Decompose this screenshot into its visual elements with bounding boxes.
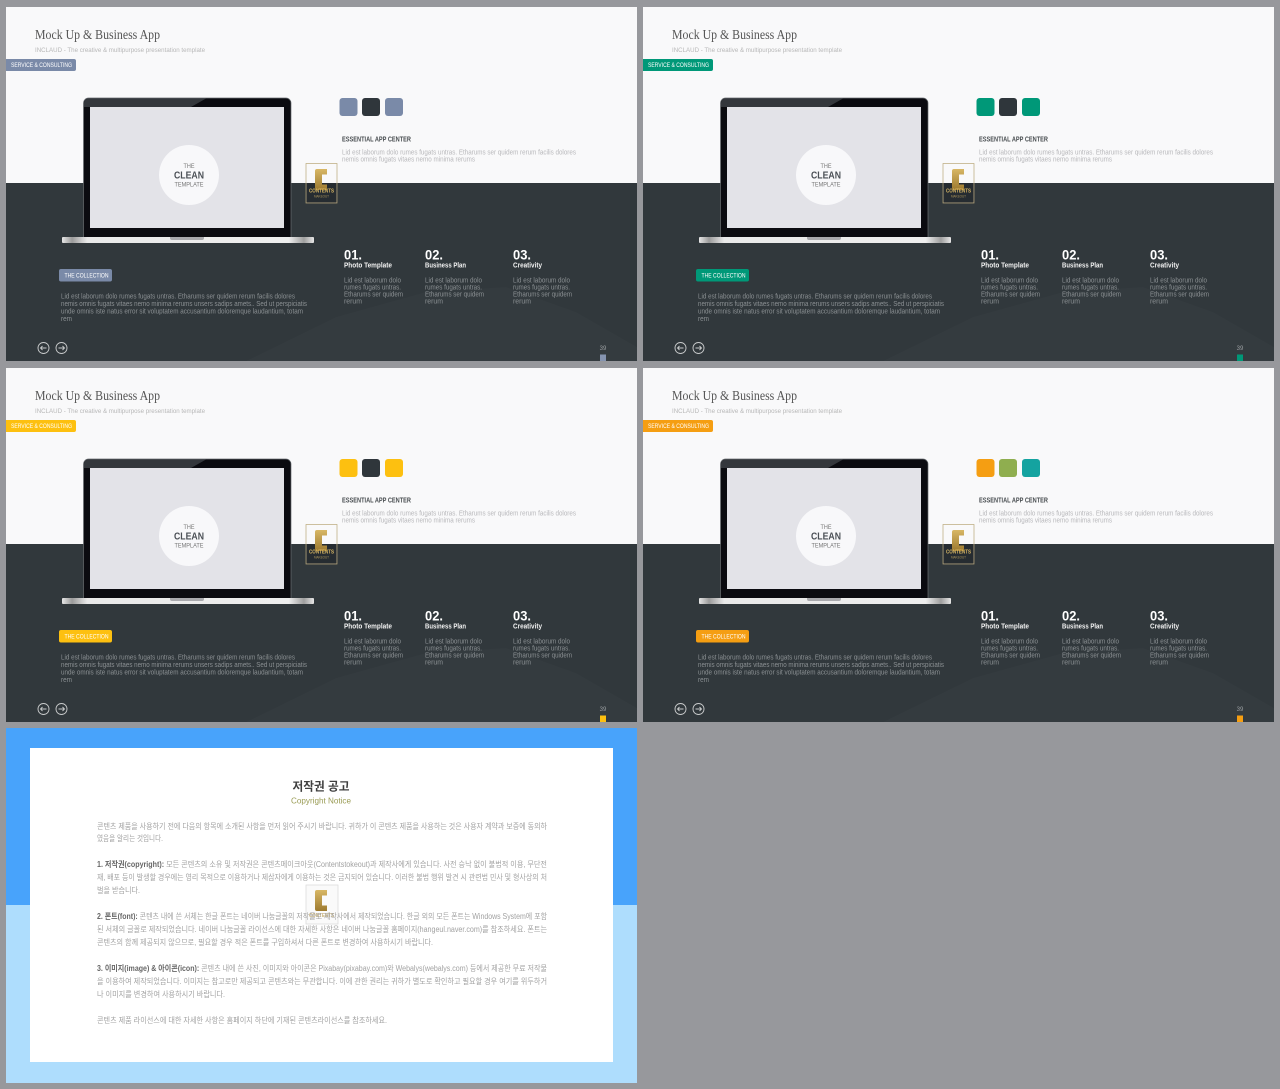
column 01 — [981, 608, 1040, 666]
column 01: rerum — [344, 660, 362, 666]
column 02: rerum — [425, 298, 443, 306]
dark lower panel — [643, 544, 1274, 722]
collection paragraph: Lid est laborum dolo rumes fugats untras. Etharums ser quidem rerum facilis dolores — [61, 294, 295, 300]
collection paragraph: rem — [61, 316, 72, 323]
screen badge: the clean template: TEMPLATE — [812, 542, 841, 550]
screen badge: the clean template — [159, 145, 219, 205]
collection paragraph: nemis omnis fugats vitaes nemo minima rerums unsers sadips amets.. Sed ut perspiciatis — [61, 662, 307, 669]
collection paragraph — [698, 654, 944, 684]
colour swatches — [340, 459, 403, 477]
collection paragraph — [61, 294, 307, 323]
section 3: image and icon: 나 이미지를 변경하여 사용하시기 바랍니다. — [97, 989, 225, 999]
service badge: SERVICE & CONSULTING — [648, 423, 709, 430]
background polygons — [246, 287, 637, 361]
screen badge: the clean template: THE — [820, 524, 832, 531]
page number: 39 — [1237, 346, 1244, 352]
collection paragraph: Lid est laborum dolo rumes fugats untras. Etharums ser quidem rerum facilis dolores — [698, 294, 932, 300]
column 01: 01. — [344, 608, 362, 624]
slide background — [643, 368, 1274, 722]
column 03: 03. — [513, 248, 531, 262]
column 02: 02. — [1062, 608, 1080, 624]
column 02 — [1062, 608, 1121, 666]
essential app center text: nemis omnis fugats vitaes nemo minima rerums — [979, 156, 1112, 164]
light blue lower background — [6, 905, 637, 1083]
closing line: 콘텐츠 제품 라이선스에 대한 자세한 사항은 홈페이지 하단에 기재된 콘텐츠라이선스를 참조하세요. — [97, 1015, 387, 1025]
collection paragraph: rem — [698, 677, 709, 684]
watermark logo: CONTENTS — [309, 188, 335, 194]
white notice panel — [30, 748, 613, 1062]
intro paragraph: 였음을 알리는 것입니다. — [97, 833, 163, 843]
collection paragraph: unde omnis iste natus error sit voluptatem accusantium doloremque laudantium, totam — [61, 308, 303, 316]
screen badge: the clean template: CLEAN — [811, 170, 841, 182]
column 03: rerum — [1150, 660, 1168, 666]
column 03: Etharums ser quidem — [1150, 292, 1209, 298]
column 02: rumes fugats untras. — [1062, 646, 1119, 652]
background polygons — [246, 648, 637, 722]
service badge — [643, 59, 713, 71]
column 01: Etharums ser quidem — [344, 292, 403, 298]
section 1: copyright: 재, 배포 등이 발생할 경우에는 영리 목적으로 이용하거나 제삼자에게 이용하는 것은 금지되어 있습니다. 이러한 불법 행위 발견 시 관련법 민사 및 형사상의 처 — [97, 872, 547, 882]
essential app center text: nemis omnis fugats vitaes nemo minima rerums — [342, 156, 475, 164]
colour swatches — [340, 98, 403, 116]
screen badge: the clean template: TEMPLATE — [174, 182, 204, 188]
screen badge: the clean template — [796, 145, 856, 205]
column 02: Etharums ser quidem — [425, 292, 484, 298]
laptop mockup — [699, 98, 951, 243]
arrow: previous — [675, 342, 686, 354]
blue upper background — [6, 728, 637, 905]
column 02: Business Plan — [425, 624, 466, 630]
title: Mock Up & Business App — [672, 27, 797, 42]
essential app center text — [979, 136, 1213, 164]
column 03: rumes fugats untras. — [1150, 646, 1207, 652]
arrow: next — [56, 704, 67, 714]
collection badge — [696, 269, 749, 282]
column 01: Photo Template — [981, 262, 1029, 270]
column 01: rerum — [981, 298, 999, 306]
column 02: Business Plan — [1062, 262, 1103, 270]
column 01: rerum — [981, 660, 999, 666]
column 02: 02. — [425, 248, 443, 262]
column 01: Etharums ser quidem — [981, 652, 1040, 660]
column 03: Lid est laborum dolo — [513, 638, 570, 646]
slide 2: green — [643, 7, 1274, 361]
service badge — [643, 420, 713, 432]
watermark logo: MAKEOUT — [314, 194, 330, 198]
essential app center text: Lid est laborum dolo rumes fugats untras. Etharums ser quidem rerum facilis dolores — [342, 150, 576, 156]
column 03: Etharums ser quidem — [1150, 652, 1209, 660]
section 2: font: 콘텐츠의 함께 제공되지 않으므로, 필요할 경우 적은 폰트를 구입하셔서 다른 폰트로 변경하여 사용하시기 바랍니다. — [97, 937, 433, 947]
watermark logo: CONTENTS — [946, 188, 972, 194]
screen badge: the clean template: TEMPLATE — [174, 542, 204, 550]
collection paragraph: unde omnis iste natus error sit voluptatem accusantium doloremque laudantium, totam — [61, 670, 303, 676]
section 2: font — [97, 911, 548, 947]
essential app center text: Lid est laborum dolo rumes fugats untras. Etharums ser quidem rerum facilis dolores — [979, 510, 1213, 518]
watermark logo: CONTENTS — [946, 550, 972, 556]
screen badge: the clean template: CLEAN — [174, 530, 204, 542]
slide background — [643, 7, 1274, 361]
watermark logo: CONTENTS — [309, 550, 335, 556]
laptop mockup — [699, 459, 951, 604]
slide 1: slate blue — [6, 7, 637, 361]
subtitle: INCLAUD - The creative & multipurpose presentation template — [35, 47, 205, 54]
column 01: Photo Template — [981, 624, 1029, 630]
column 02: rumes fugats untras. — [1062, 284, 1119, 292]
column 03: rerum — [1150, 298, 1168, 306]
section 2: font: 2. 폰트(font): 콘텐츠 내에 쓴 서체는 한글 폰트는 네이버 나눔글꼴의 저작물로 제작사에서 제작되었습니다. 한글 외의 모든 폰트는 Windows System에 포함 — [97, 911, 548, 921]
title: Mock Up & Business App — [672, 388, 797, 403]
page number — [1237, 346, 1244, 361]
section 1: copyright: 벌을 받습니다. — [97, 885, 140, 895]
column 03: Lid est laborum dolo — [1150, 278, 1207, 284]
subtitle: INCLAUD - The creative & multipurpose presentation template — [672, 408, 842, 415]
arrow: previous — [675, 704, 686, 714]
column 02: rerum — [425, 660, 443, 666]
colour swatches — [976, 459, 1040, 477]
column 03: 03. — [1150, 248, 1168, 262]
subtitle: INCLAUD - The creative & multipurpose presentation template — [672, 47, 842, 54]
column 02: Etharums ser quidem — [1062, 652, 1121, 660]
title: Mock Up & Business App — [35, 388, 160, 403]
column 01 — [344, 608, 403, 666]
dark lower panel — [643, 183, 1274, 361]
column 02 — [425, 608, 484, 666]
colour swatches — [976, 98, 1040, 116]
column 01: 01. — [981, 248, 999, 262]
collection badge — [59, 269, 112, 282]
watermark logo — [306, 524, 337, 564]
page number — [600, 707, 607, 722]
watermark logo — [306, 885, 338, 924]
column 01: Lid est laborum dolo — [344, 638, 401, 646]
section 3: image and icon — [97, 963, 547, 999]
column 03 — [513, 608, 572, 666]
column 02: 02. — [425, 608, 443, 624]
column 03: Lid est laborum dolo — [1150, 638, 1207, 646]
page number: 39 — [600, 707, 607, 713]
slide 4: orange, olive and teal — [643, 368, 1274, 722]
column 03: Etharums ser quidem — [513, 292, 572, 298]
background polygons — [883, 648, 1274, 722]
column 03: Creativity — [513, 262, 542, 270]
service badge — [6, 420, 76, 432]
column 01: Etharums ser quidem — [981, 292, 1040, 298]
column 03: Lid est laborum dolo — [513, 278, 570, 284]
column 02: rerum — [1062, 298, 1080, 306]
watermark logo — [306, 164, 337, 203]
arrow: next — [56, 342, 67, 354]
slide background — [6, 7, 637, 361]
column 03: rumes fugats untras. — [513, 646, 570, 652]
watermark logo — [943, 164, 974, 203]
collection badge: THE COLLECTION — [64, 634, 109, 640]
page number: 39 — [600, 346, 607, 352]
column 03: Creativity — [513, 624, 542, 630]
screen badge: the clean template — [159, 506, 219, 566]
slide 5: copyright notice — [6, 728, 637, 1083]
slide background — [6, 368, 637, 722]
intro paragraph — [97, 821, 548, 843]
column 03: Etharums ser quidem — [513, 652, 572, 660]
essential app center text — [342, 498, 576, 524]
column 02: rumes fugats untras. — [425, 284, 482, 292]
screen badge: the clean template — [796, 506, 856, 566]
collection paragraph — [698, 294, 944, 323]
column 01: rerum — [344, 298, 362, 306]
watermark logo: MAKEOUT — [951, 194, 967, 198]
arrow: next — [693, 342, 704, 354]
arrow: previous — [38, 342, 49, 354]
column 01: rumes fugats untras. — [981, 646, 1038, 652]
collection badge: THE COLLECTION — [702, 272, 746, 280]
section 1: copyright — [97, 859, 547, 895]
column 02: Lid est laborum dolo — [425, 278, 482, 284]
column 03 — [513, 248, 572, 306]
essential app center text: ESSENTIAL APP CENTER — [342, 136, 411, 144]
column 02 — [425, 248, 484, 306]
column 03: rerum — [513, 660, 531, 666]
watermark logo: CONTENTS — [309, 913, 335, 919]
column 01 — [344, 248, 403, 306]
section 3: image and icon: 을 이용하여 제작되었습니다. 이미지는 참고로만 제공되고 콘텐츠와는 무관합니다. 이에 관한 권리는 귀하가 별도로 확인하고 필요할 경우 여기를 위두하거 — [97, 976, 547, 986]
column 03: rumes fugats untras. — [1150, 284, 1207, 292]
column 02 — [1062, 248, 1121, 306]
column 01: Lid est laborum dolo — [344, 278, 401, 284]
collection paragraph: unde omnis iste natus error sit voluptatem accusantium doloremque laudantium, totam — [698, 308, 940, 316]
collection paragraph: rem — [698, 316, 709, 323]
collection paragraph: Lid est laborum dolo rumes fugats untras. Etharums ser quidem rerum facilis dolores — [698, 654, 932, 662]
column 03: rumes fugats untras. — [513, 284, 570, 292]
column 01: rumes fugats untras. — [344, 646, 401, 652]
notice heading: 저작권 공고 — [292, 778, 350, 794]
slide 3: yellow — [6, 368, 637, 722]
column 01: Lid est laborum dolo — [981, 278, 1038, 284]
column 02: Business Plan — [425, 262, 466, 270]
section 3: image and icon: 3. 이미지(image) & 아이콘(icon): 콘텐츠 내에 쓴 사진, 이미지와 아이콘은 Pixabay(pixabay.com)와 Webalys(webalys.com) 등에서 제공한 무료 저작물 — [97, 963, 547, 973]
collection badge: THE COLLECTION — [64, 272, 109, 280]
column 03: Creativity — [1150, 624, 1179, 630]
service badge: SERVICE & CONSULTING — [11, 62, 72, 69]
column 02: Lid est laborum dolo — [425, 638, 482, 646]
page number — [600, 346, 607, 361]
column 01: rumes fugats untras. — [981, 284, 1038, 292]
column 02: Lid est laborum dolo — [1062, 638, 1119, 646]
column 01 — [981, 248, 1040, 306]
essential app center text: ESSENTIAL APP CENTER — [979, 136, 1048, 144]
column 01: Lid est laborum dolo — [981, 638, 1038, 646]
column 02: Business Plan — [1062, 624, 1103, 630]
column 03: Creativity — [1150, 262, 1179, 270]
service badge: SERVICE & CONSULTING — [11, 423, 72, 430]
collection badge: THE COLLECTION — [702, 634, 746, 640]
column 02: rumes fugats untras. — [425, 646, 482, 652]
title: Mock Up & Business App — [35, 27, 160, 42]
column 03 — [1150, 248, 1209, 306]
screen badge: the clean template: TEMPLATE — [812, 182, 841, 188]
laptop mockup — [62, 98, 314, 243]
essential app center text: Lid est laborum dolo rumes fugats untras. Etharums ser quidem rerum facilis dolores — [342, 510, 576, 518]
collection badge — [59, 630, 112, 642]
background polygons — [883, 287, 1274, 361]
laptop mockup — [62, 459, 314, 604]
screen badge: the clean template: THE — [820, 163, 832, 170]
column 03: 03. — [1150, 608, 1168, 624]
page number: 39 — [1237, 707, 1244, 713]
collection paragraph: unde omnis iste natus error sit voluptatem accusantium doloremque laudantium, totam — [698, 670, 940, 676]
collection paragraph: nemis omnis fugats vitaes nemo minima rerums unsers sadips amets.. Sed ut perspiciatis — [698, 662, 944, 669]
column 01: 01. — [981, 608, 999, 624]
section 1: copyright: 1. 저작권(copyright): 모든 콘텐츠의 소유 및 저작권은 콘텐츠메이크아웃(Contentstokeout)과 제작사에게 있습니다. 사전 승낙 없이 불법적 이용, 무단전 — [97, 859, 547, 869]
screen badge: the clean template: CLEAN — [811, 530, 841, 542]
column 02: Lid est laborum dolo — [1062, 278, 1119, 284]
screen badge: the clean template: THE — [184, 524, 195, 531]
collection paragraph: nemis omnis fugats vitaes nemo minima rerums unsers sadips amets.. Sed ut perspiciatis — [698, 301, 944, 308]
column 01: 01. — [344, 248, 362, 262]
column 03: 03. — [513, 608, 531, 624]
column 03: rerum — [513, 298, 531, 306]
arrow: previous — [38, 704, 49, 714]
column 02: Etharums ser quidem — [425, 652, 484, 660]
collection paragraph — [61, 654, 307, 684]
essential app center text — [979, 498, 1213, 524]
essential app center text: nemis omnis fugats vitaes nemo minima rerums — [342, 518, 475, 524]
section 2: font: 된 서체의 글꼴로 제작되었습니다. 네이버 나눔글꼴 라이선스에 대한 자세한 사항은 네이버 나눔글꼴 홈페이지(hangeul.naver.com)를 참조하세요. 폰트는 — [97, 924, 547, 934]
column 01: rumes fugats untras. — [344, 284, 401, 292]
essential app center text: ESSENTIAL APP CENTER — [342, 498, 411, 504]
collection paragraph: Lid est laborum dolo rumes fugats untras. Etharums ser quidem rerum facilis dolores — [61, 654, 295, 662]
column 02: Etharums ser quidem — [1062, 292, 1121, 298]
column 02: rerum — [1062, 660, 1080, 666]
essential app center text: Lid est laborum dolo rumes fugats untras. Etharums ser quidem rerum facilis dolores — [979, 150, 1213, 156]
collection badge — [696, 630, 749, 642]
service badge: SERVICE & CONSULTING — [648, 62, 709, 69]
watermark logo — [943, 524, 974, 564]
dark lower panel — [6, 544, 637, 722]
service badge — [6, 59, 76, 71]
column 01: Etharums ser quidem — [344, 652, 403, 660]
screen badge: the clean template: CLEAN — [174, 170, 204, 182]
subtitle: INCLAUD - The creative & multipurpose presentation template — [35, 408, 205, 415]
collection paragraph: nemis omnis fugats vitaes nemo minima rerums unsers sadips amets.. Sed ut perspiciatis — [61, 301, 307, 308]
dark lower panel — [6, 183, 637, 361]
watermark logo: MAKEOUT — [951, 556, 967, 560]
column 03 — [1150, 608, 1209, 666]
watermark logo: MAKEOUT — [314, 556, 330, 560]
column 01: Photo Template — [344, 624, 392, 630]
essential app center text: nemis omnis fugats vitaes nemo minima rerums — [979, 518, 1112, 524]
column 01: Photo Template — [344, 262, 392, 270]
notice subheading: Copyright Notice — [291, 796, 352, 806]
essential app center text: ESSENTIAL APP CENTER — [979, 498, 1048, 504]
screen badge: the clean template: THE — [184, 163, 195, 170]
essential app center text — [342, 136, 576, 164]
arrow: next — [693, 704, 704, 714]
collection paragraph: rem — [61, 677, 72, 684]
column 02: 02. — [1062, 248, 1080, 262]
page number — [1237, 707, 1244, 722]
intro paragraph: 콘텐츠 제품을 사용하기 전에 다음의 항목에 소개된 사항을 먼저 읽어 주시기 바랍니다. 귀하가 이 콘텐츠 제품을 사용하는 것은 사용자 계약과 보증에 동의하 — [97, 821, 548, 831]
